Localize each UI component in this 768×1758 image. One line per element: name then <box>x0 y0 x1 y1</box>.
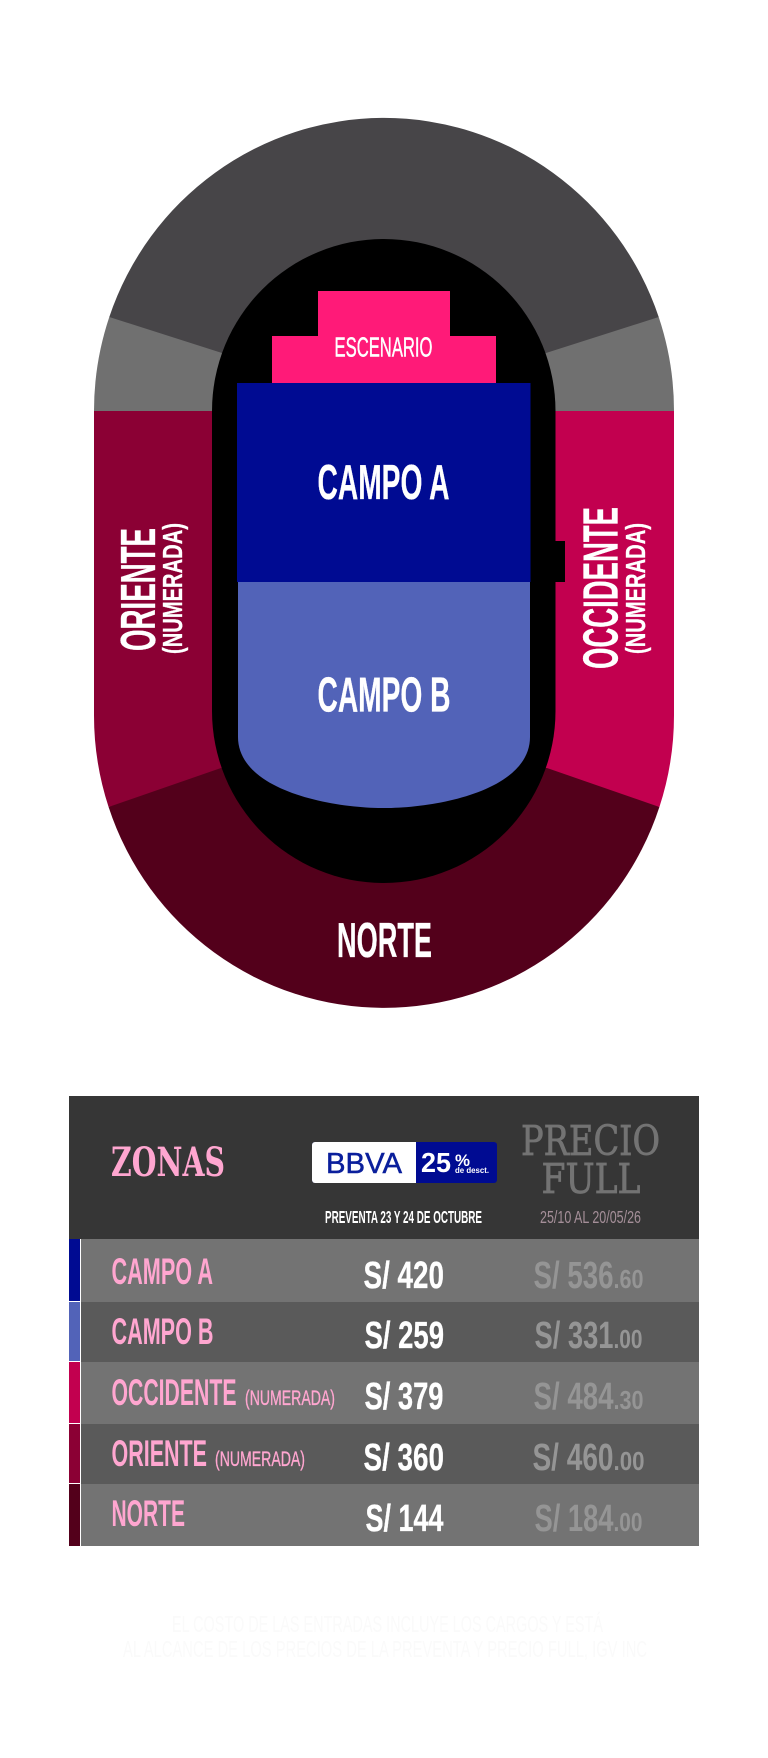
section: norte <box>109 760 659 1008</box>
full price: S/ 460 <box>532 1437 614 1479</box>
section: upper left stands gray <box>94 310 240 411</box>
stage <box>272 291 496 383</box>
price table <box>69 1096 699 1546</box>
stadium map <box>94 118 674 1008</box>
discount 25: 25 <box>421 1147 451 1178</box>
row: norte <box>69 1484 699 1546</box>
table header <box>69 1096 699 1239</box>
cents: .30 <box>614 1385 644 1415</box>
row label: OCCIDENTE <box>112 1372 236 1413</box>
de desct: de desct. <box>455 1166 489 1175</box>
section: upper right stands gray <box>528 310 674 411</box>
full price dates: 25/10 AL 20/05/26 <box>540 1207 641 1227</box>
precio full heading <box>521 1117 660 1203</box>
zone: campo a <box>237 383 530 582</box>
precio full heading: PRECIO <box>521 1117 660 1165</box>
occidente label: OCCIDENTE <box>574 507 628 669</box>
footnote faint <box>123 1611 647 1662</box>
black notch <box>555 541 565 582</box>
oriente numerada: (NUMERADA) <box>157 523 188 654</box>
row: campo b <box>69 1302 699 1362</box>
full price: S/ 331 <box>534 1315 614 1357</box>
row label: ORIENTE <box>112 1433 207 1474</box>
stage label: ESCENARIO <box>334 332 432 362</box>
row: occidente <box>69 1362 699 1424</box>
cents: .60 <box>614 1264 644 1294</box>
row label: NORTE <box>112 1493 185 1534</box>
campo b label: CAMPO B <box>318 668 450 722</box>
presale price: S/ 379 <box>364 1376 444 1418</box>
presale price: S/ 259 <box>364 1315 444 1357</box>
presale dates: PREVENTA 23 Y 24 DE OCTUBRE <box>325 1207 482 1227</box>
row: oriente <box>69 1424 699 1484</box>
full price: S/ 536 <box>534 1255 614 1297</box>
occidente numerada: (NUMERADA) <box>620 523 651 654</box>
oriente label: ORIENTE <box>112 528 166 651</box>
zonas heading: ZONAS <box>111 1139 225 1186</box>
presale price: S/ 420 <box>364 1255 444 1297</box>
row label: CAMPO B <box>112 1311 214 1352</box>
numerada: (NUMERADA) <box>245 1387 335 1410</box>
section: occidente <box>540 411 674 807</box>
oriente label <box>112 523 188 654</box>
presale price: S/ 144 <box>366 1498 444 1540</box>
cents: .00 <box>614 1446 644 1476</box>
bbva badge <box>312 1142 497 1183</box>
field black <box>212 239 556 883</box>
norte label: NORTE <box>337 914 432 968</box>
zone: campo b <box>238 582 530 808</box>
row: campo a <box>69 1239 699 1302</box>
row label: CAMPO A <box>112 1251 213 1292</box>
cents: .00 <box>614 1324 642 1354</box>
section: oriente <box>94 411 230 807</box>
cents: .00 <box>614 1507 642 1537</box>
bbva logo text: BBVA <box>326 1148 403 1180</box>
numerada: (NUMERADA) <box>215 1448 305 1471</box>
campo a label: CAMPO A <box>318 456 450 510</box>
presale price: S/ 360 <box>364 1437 444 1479</box>
section: upper stands dark <box>109 118 659 353</box>
full price: S/ 184 <box>534 1498 614 1540</box>
percent sign: % <box>455 1151 470 1170</box>
occidente label <box>574 507 651 669</box>
full price: S/ 484 <box>534 1376 614 1418</box>
full word: FULL <box>542 1155 640 1203</box>
